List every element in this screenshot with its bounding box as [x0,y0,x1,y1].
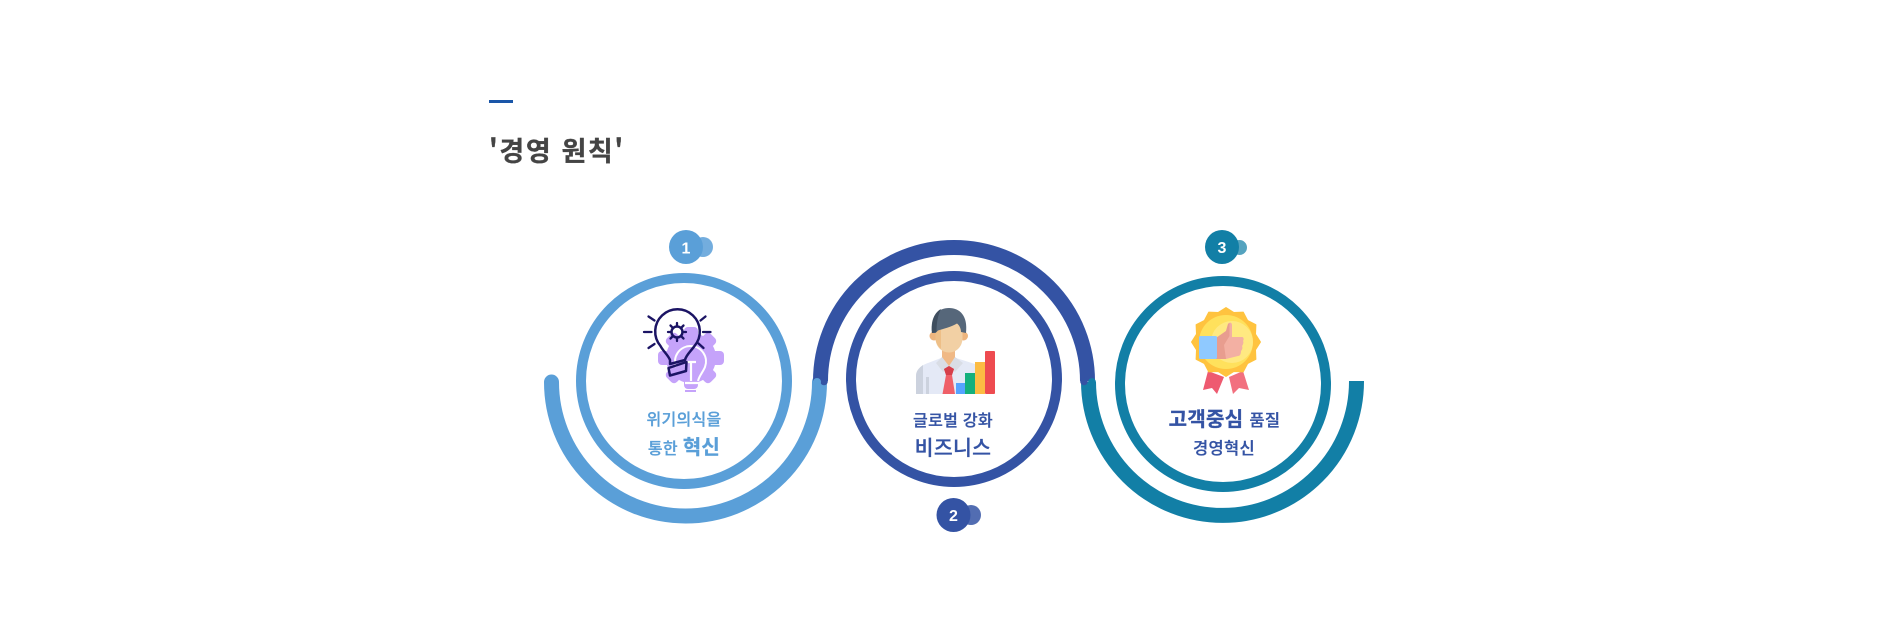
label text 2: 글로벌 강화 [913,407,993,431]
panel: customer quality [1120,230,1326,487]
panel: crisis innovation [581,230,787,484]
large arc: blue [552,382,820,516]
large arc: teal [1088,381,1357,515]
label text 1: 위기의식을 [646,406,722,430]
number badge 2 [936,498,981,532]
number badge 1: 1 [682,240,691,258]
label text 2: 비즈니스 [915,431,991,461]
label text 3: 경영혁신 [1193,435,1255,459]
icon: medal with thumbs up [1192,308,1260,394]
ring 3 [1120,281,1326,487]
ring 2 [851,276,1057,482]
label text 1: 통한 혁신 [648,431,720,460]
label text 2 [913,407,993,461]
ring 1 [581,278,787,484]
number badge 1 [669,230,713,264]
number badge 3: 3 [1218,240,1227,257]
number badge 3 [1205,230,1247,264]
icon: businessman with bar chart [916,308,995,394]
icon: light bulb and gear [644,309,724,391]
label text 3: 고객중심 품질 [1169,403,1280,432]
title: '경영 원칙' [489,130,625,169]
number badge 2: 2 [949,508,958,525]
heading accent bar [489,100,513,103]
arc junction: right [1080,378,1096,386]
large arc: dark blue [820,248,1088,381]
label text 1 [646,406,722,460]
panel: global business [851,276,1057,532]
arc junction: left [813,378,828,386]
label text 3 [1169,403,1280,459]
